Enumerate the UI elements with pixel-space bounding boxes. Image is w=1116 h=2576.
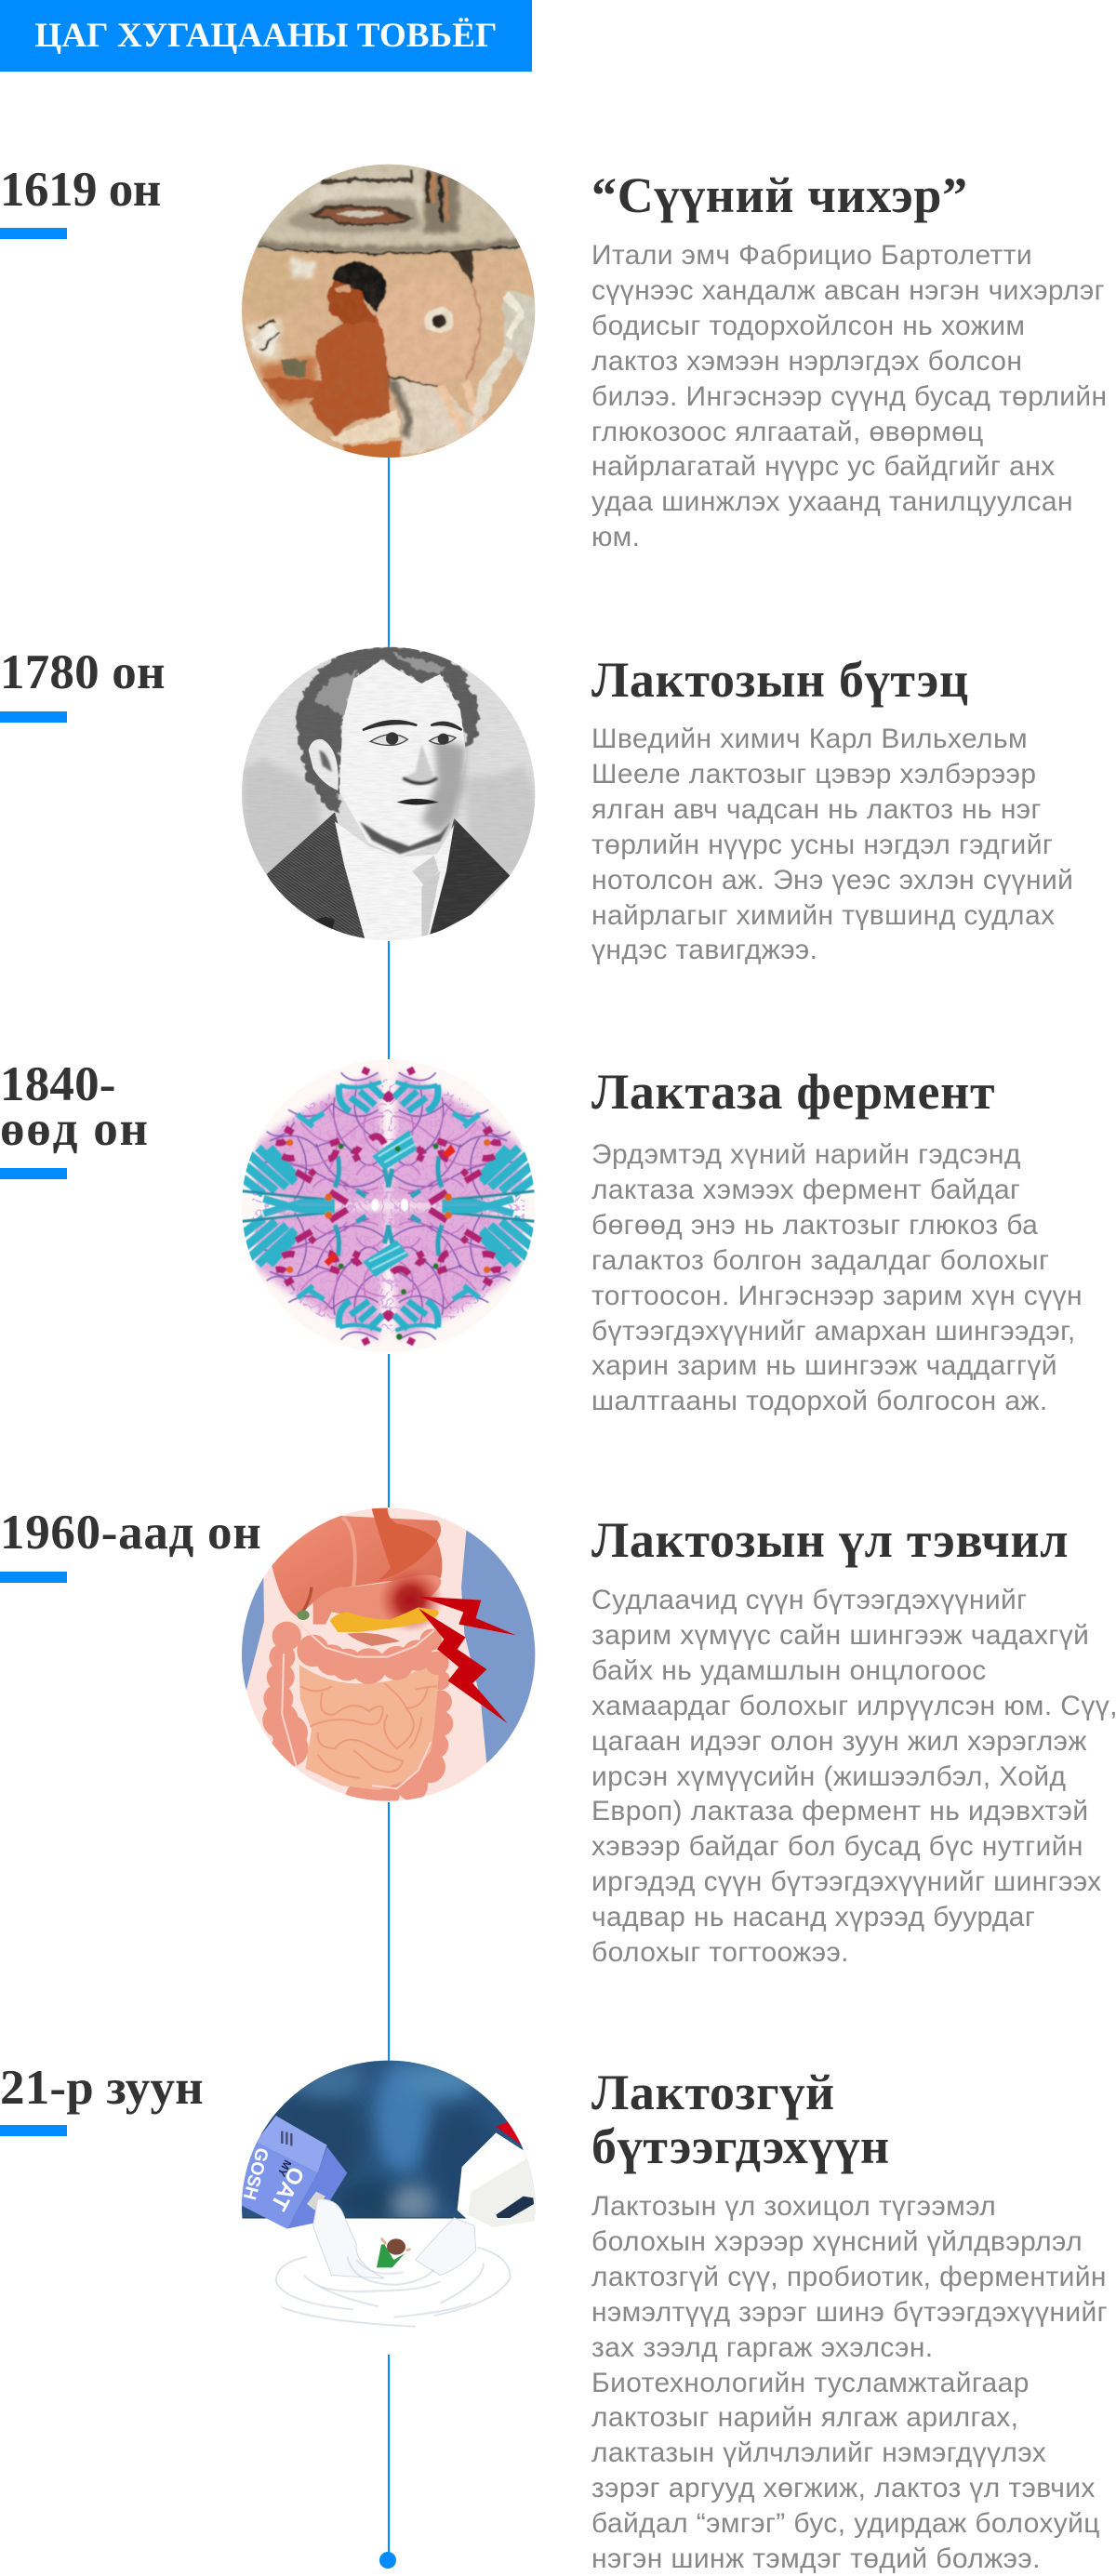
body text 5: зах зээлд гаргаж эхэлсэн.	[591, 2332, 934, 2363]
body text 4: зарим хүмүүс сайн шингээж чадахгүй	[591, 1620, 1089, 1651]
body text 2: төрлийн нүүрс усны нэгдэл гэдгийг	[591, 830, 1053, 860]
body text 2: найрлагыг химийн түвшинд судлах	[591, 900, 1055, 931]
body text 4: болохыг тогтоожээ.	[591, 1937, 849, 1968]
body text 3: шалтгааны тодорхой болгосон аж.	[591, 1386, 1048, 1416]
body text 2: Шведийн химич Карл Вильхельм	[591, 724, 1028, 754]
icon: engraved portrait	[242, 647, 536, 940]
body text 2: Шееле лактозыг цэвэр хэлбэрээр	[591, 759, 1036, 790]
icon: watercolor milk cartons pouring: GOSH	[239, 2145, 272, 2201]
heading: lactose-free products: Лактозгүй	[591, 2065, 835, 2120]
year: 21st century: 21-р зуун	[0, 2061, 204, 2115]
body text 4: Судлаачид сүүн бүтээгдэхүүнийг	[591, 1585, 1027, 1615]
body text 1: лактоз хэмээн нэрлэгдэх болсон	[591, 346, 1022, 377]
body text 3: бөгөөд энэ нь лактозыг глюкоз ба	[591, 1210, 1038, 1241]
body text 4: цагаан идээг олон зуун жил хэрэглэж	[591, 1726, 1087, 1757]
body text 1: найрлагатай нүүрс ус байдгийг анх	[591, 451, 1056, 482]
title banner: ЦАГ ХУГАЦААНЫ ТОВЬЁГ	[34, 17, 498, 55]
year underline 1840s	[0, 1168, 67, 1179]
body text 4: байх нь удамшлын онцлогоос	[591, 1655, 987, 1686]
year underline 1780	[0, 711, 67, 723]
heading: lactose structure: Лактозын бүтэц	[591, 652, 969, 708]
body text 1: удаа шинжлэх ухаанд танилцуулсан	[591, 486, 1073, 517]
year underline 1619	[0, 228, 67, 239]
icon: digestive system with pain bolts	[242, 1508, 536, 1801]
heading: lactose-free products: бүтээгдэхүүн	[591, 2118, 890, 2174]
timeline end dot	[379, 2552, 396, 2569]
body text 5: байдал “эмгэг” бус, удирдаж болохуйц	[591, 2508, 1100, 2539]
body text 2	[591, 724, 1073, 965]
body text 5: нэмэлтүүд зэрэг шинэ бүтээгдэхүүнийг	[591, 2297, 1108, 2328]
year: 1840s	[0, 1057, 150, 1156]
body text 2: ялган авч чадсан нь лактоз нь нэг	[591, 794, 1042, 825]
body text 3: лактаза хэмээх фермент байдаг	[591, 1175, 1020, 1205]
body text 1: билээ. Ингэснээр сүүнд бусад төрлийн	[591, 381, 1108, 412]
body text 4: иргэдэд сүүн бүтээгдэхүүнийг шингээх	[591, 1866, 1102, 1897]
body text 1: глюкозоос ялгаатай, өвөрмөц	[591, 417, 984, 447]
body text 4	[591, 1585, 1116, 1968]
heading: sugar of milk: “Сүүний чихэр”	[591, 167, 968, 223]
icon: watercolor milk cartons pouring: MY	[275, 2158, 294, 2179]
body text 5: лактозгүй сүү, пробиотик, ферментийн	[591, 2262, 1107, 2292]
body text 2: үндэс тавигджээ.	[591, 935, 817, 965]
icon: watercolor milk cartons pouring	[242, 2061, 536, 2328]
body text 1: бодисыг тодорхойлсон нь хожим	[591, 311, 1025, 341]
timeline line segment 5	[387, 2355, 389, 2559]
body text 5: Биотехнологийн тусламжтайгаар	[591, 2368, 1030, 2398]
timeline line segment 3	[387, 1354, 389, 1507]
body text 4: ирсэн хүмүүсийн (жишээлбэл, Хойд	[591, 1761, 1066, 1792]
heading: lactose intolerance: Лактозын үл тэвчил	[591, 1512, 1069, 1568]
timeline line segment 4	[387, 1802, 389, 2061]
timeline line segment 1	[387, 458, 389, 647]
title banner	[0, 0, 532, 72]
heading: lactase enzyme: Лактаза фермент	[591, 1064, 995, 1120]
body text 3: Эрдэмтэд хүний нарийн гэдсэнд	[591, 1139, 1021, 1170]
year underline 21st century	[0, 2125, 67, 2136]
body text 1: Итали эмч Фабрицио Бартолетти	[591, 240, 1032, 271]
icon: lactase protein structure	[242, 1060, 535, 1352]
year: 1780: 1780 он	[0, 645, 166, 699]
body text 5: зэрэг аргууд хөгжиж, лактоз үл тэвчих	[591, 2473, 1096, 2503]
icon: Egyptian wall painting	[242, 164, 536, 458]
body text 4: хамаардаг болохыг илрүүлсэн юм. Сүү,	[591, 1691, 1116, 1721]
body text 3: харин зарим нь шингээж чаддаггүй	[591, 1350, 1057, 1381]
body text 3: тогтоосон. Ингэснээр зарим хүн сүүн	[591, 1281, 1083, 1311]
body text 3: галактоз болгон задалдаг болохыг	[591, 1245, 1049, 1276]
body text 5: лактозыг нарийн ялгаж арилгах,	[591, 2402, 1018, 2433]
year: 1840s: өөд он	[0, 1102, 150, 1156]
timeline line segment 2	[387, 941, 389, 1059]
body text 2: нотолсон аж. Энэ үеэс эхлэн сүүний	[591, 865, 1073, 896]
body text 4: Европ) лактаза фермент нь идэвхтэй	[591, 1796, 1089, 1826]
icon: watercolor milk cartons pouring: OAT	[265, 2162, 309, 2214]
body text 5: нэгэн шинж тэмдэг төдий болжээ.	[591, 2543, 1041, 2574]
year: 1960s: 1960-аад он	[0, 1506, 261, 1560]
body text 5	[591, 2191, 1108, 2574]
body text 4: чадвар нь насанд хүрээд буурдаг	[591, 1902, 1035, 1932]
body text 1	[591, 240, 1108, 552]
heading: lactose-free products	[591, 2065, 890, 2174]
body text 5: Лактозын үл зохицол түгээмэл	[591, 2191, 996, 2222]
body text 5: болохын хэрээр хүнсний үйлдвэрлэл	[591, 2226, 1083, 2257]
year: 1619: 1619 он	[0, 163, 161, 217]
year: 1840s: 1840-	[0, 1057, 116, 1111]
body text 3: бүтээгдэхүүнийг амархан шингээдэг,	[591, 1316, 1076, 1347]
body text 4: хэвээр байдаг бол бусад бүс нутгийн	[591, 1831, 1083, 1862]
body text 5: лактазын үйлчлэлийг нэмэгдүүлэх	[591, 2437, 1046, 2468]
body text 1: сүүнээс хандалж авсан нэгэн чихэрлэг	[591, 275, 1105, 306]
year underline 1960s	[0, 1572, 67, 1583]
body text 1: юм.	[591, 522, 640, 552]
body text 3	[591, 1139, 1083, 1416]
